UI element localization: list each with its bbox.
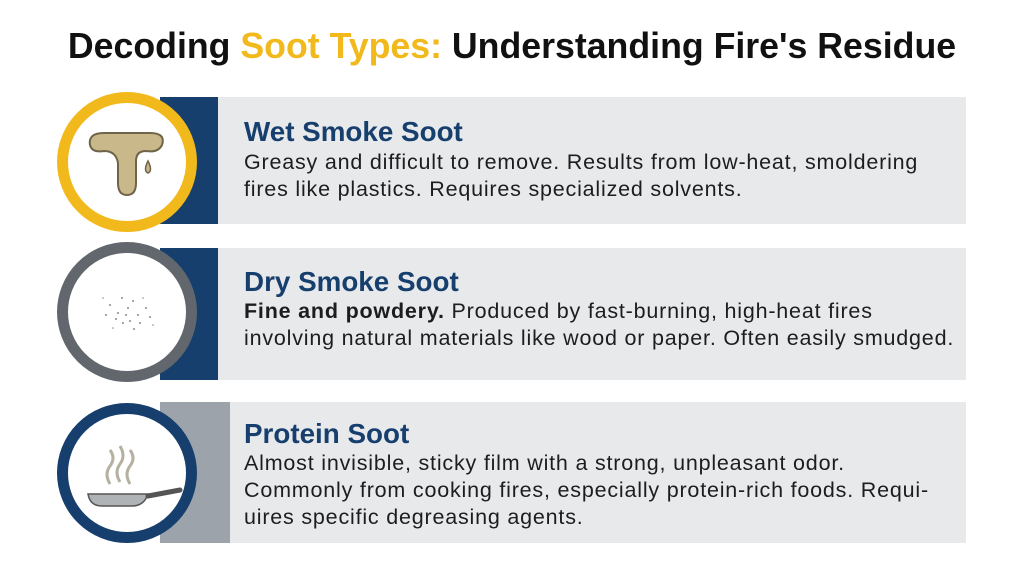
title: Decoding Soot Types: Understanding Fire's Residue (68, 26, 956, 66)
icon: frying pan (57, 403, 197, 543)
text: Greasy and difficult to remove. Results from low-heat, smoldering (244, 150, 918, 174)
text: fires like plastics. Requires specialized solvents. (244, 177, 742, 201)
icon: grease drip (57, 92, 197, 232)
panel: dry smoke soot (57, 242, 966, 382)
text: Almost invisible, sticky film with a strong, unpleasant odor. (244, 451, 845, 475)
text (244, 150, 918, 201)
text (244, 299, 954, 350)
panel: wet smoke soot (57, 92, 966, 232)
heading: Dry Smoke Soot (244, 266, 459, 297)
icon: powder (57, 242, 197, 382)
text: Fine and powdery. Produced by fast-burning, high-heat fires (244, 299, 873, 323)
heading: Wet Smoke Soot (244, 116, 463, 147)
text (244, 451, 929, 529)
text: uires specific degreasing agents. (244, 505, 584, 529)
text: Commonly from cooking fires, especially protein-rich foods. Requi- (244, 478, 929, 502)
text: involving natural materials like wood or paper. Often easily smudged. (244, 326, 954, 350)
panel: protein soot (57, 402, 966, 543)
heading: Protein Soot (244, 418, 409, 449)
